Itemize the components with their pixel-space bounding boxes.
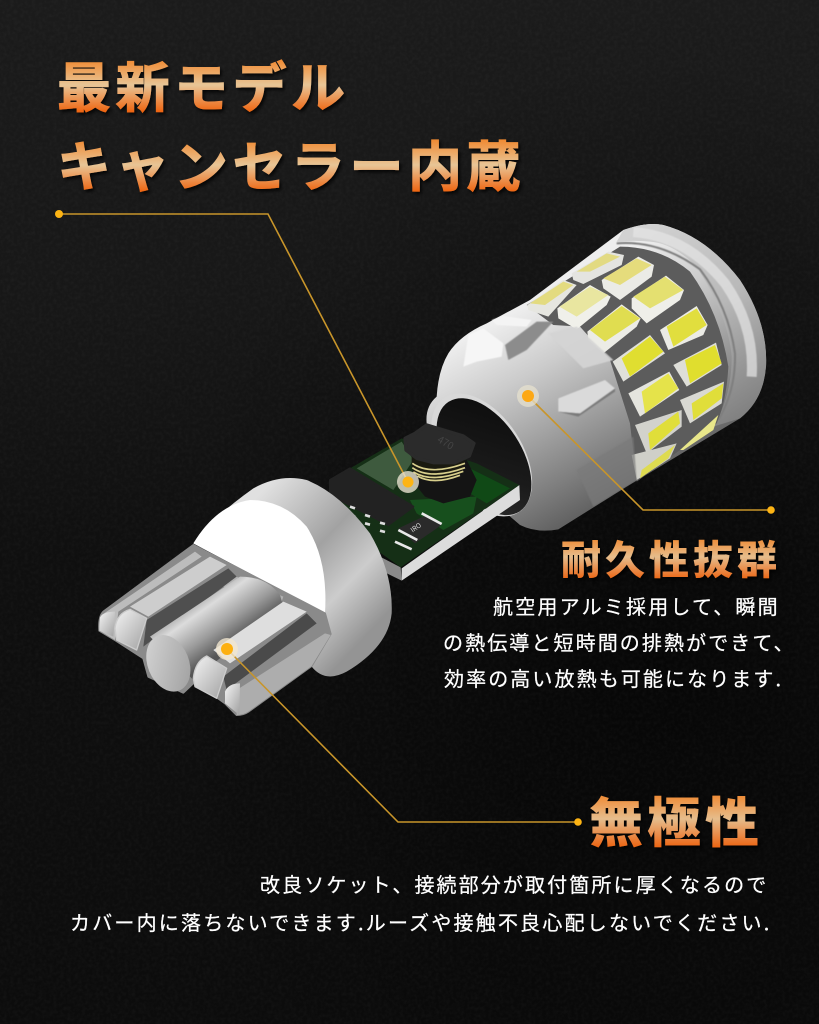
board front edge xyxy=(380,557,402,581)
target dot on terminal xyxy=(216,638,238,660)
description text: の熱伝導と短時間の排熱ができて、 xyxy=(443,627,796,656)
right rail cap xyxy=(193,656,227,698)
description text xyxy=(70,869,772,936)
right strip xyxy=(213,602,307,663)
section: durability xyxy=(443,528,796,692)
right groove xyxy=(223,613,317,690)
left rail end xyxy=(99,612,115,637)
board highlights xyxy=(357,442,413,490)
title line 2: キャンセラー内蔵 xyxy=(57,123,525,202)
left rail cap xyxy=(115,609,147,650)
left groove xyxy=(143,568,237,647)
section: no polarity xyxy=(70,779,772,936)
centre cylinder xyxy=(150,577,283,680)
board top xyxy=(330,438,519,567)
left strip xyxy=(130,557,227,617)
small inductor chip IRO: IRO xyxy=(408,520,423,534)
leader line: durability to aluminium body xyxy=(517,385,775,514)
LED carrier dark area xyxy=(527,247,728,482)
rim shadow groove xyxy=(617,243,735,420)
heading: 耐久性抜群: 耐久性抜群 xyxy=(561,528,781,586)
dome body xyxy=(193,478,392,676)
description text: 航空用アルミ採用して、瞬間 xyxy=(493,591,780,620)
LED chips xyxy=(527,252,724,480)
description text: カバー内に落ちないできます.ルーズや接触不良心配しないでください. xyxy=(70,907,772,936)
inner floor between strips xyxy=(223,577,283,607)
inductor xyxy=(405,425,477,503)
rim highlight xyxy=(633,232,752,377)
T20 socket base xyxy=(99,478,392,715)
end dot xyxy=(574,818,582,826)
right outer edge xyxy=(237,633,331,715)
description text xyxy=(443,591,796,692)
cylinder end xyxy=(138,628,198,698)
leader line: canceller to PCB xyxy=(55,210,419,493)
board side edges xyxy=(402,485,520,581)
left edge xyxy=(99,552,202,640)
bulb body silhouette xyxy=(426,224,766,531)
target dot on PCB xyxy=(397,471,419,493)
leader line: polarity to terminal xyxy=(216,638,582,826)
LED bulb head (aluminium body, seen from above) xyxy=(410,224,766,534)
heading: 無極性: 無極性 xyxy=(589,779,763,858)
heat-sink fins xyxy=(463,316,637,507)
right rail end xyxy=(225,683,240,715)
socket opening lip xyxy=(410,376,553,534)
dark interior xyxy=(417,382,551,532)
start dot xyxy=(55,210,63,218)
inductor: 470 xyxy=(435,431,457,453)
description text: 効率の高い放熱も可能になります. xyxy=(444,663,783,692)
transistor chip xyxy=(330,468,413,532)
target dot on body xyxy=(517,385,539,407)
title line 1: 最新モデル xyxy=(57,44,350,123)
description text: 改良ソケット、接続部分が取付箇所に厚くなるので xyxy=(260,869,768,898)
base plate xyxy=(99,545,331,715)
end dot xyxy=(767,506,775,514)
title: 最新モデル キャンセラー内蔵 xyxy=(57,44,525,202)
PCB driver board with inductor and chips xyxy=(330,425,520,581)
rim band at the bulb top xyxy=(617,224,766,427)
white dome face xyxy=(193,500,325,613)
small inductor chip IRO xyxy=(395,513,442,549)
